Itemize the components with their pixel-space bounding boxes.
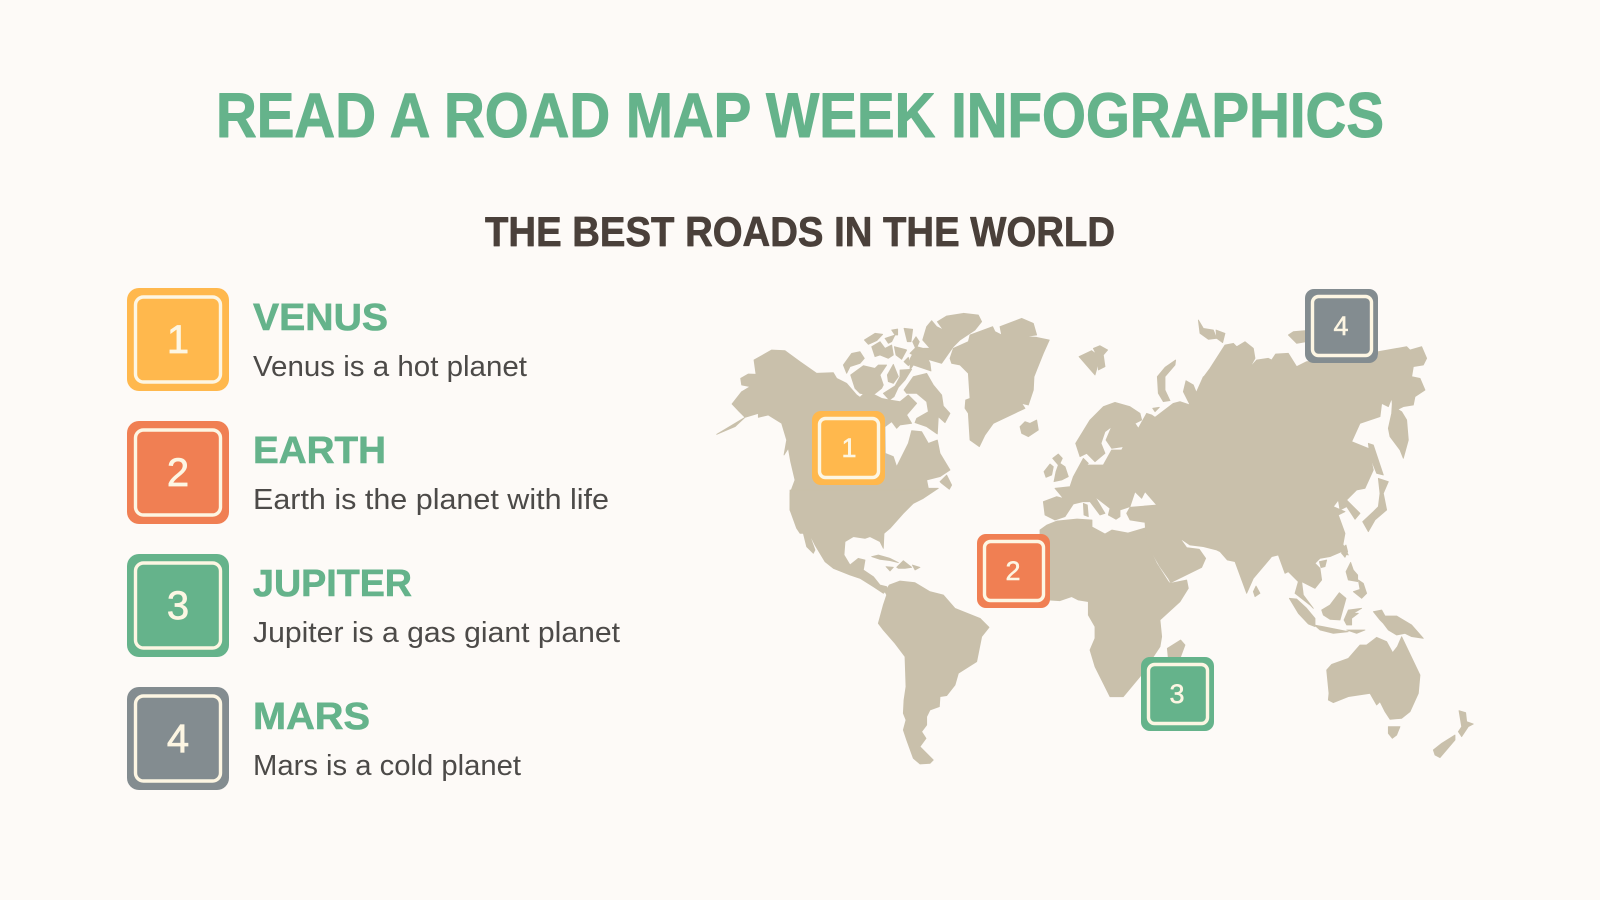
legend item: Jupiter: JUPITER [253,563,412,605]
legend item: Earth: Earth is the planet with life [253,484,609,516]
Mexico and Central America [790,490,920,593]
North America [717,313,982,533]
legend item: Venus: 1 [167,318,189,362]
Eurasia [1043,320,1427,608]
map marker 2: 2 [1005,556,1021,586]
map marker 2 [977,534,1050,608]
South America and Africa [878,519,1188,764]
map marker 4: 4 [1333,311,1349,341]
Greenland and Iceland [950,318,1049,447]
Arctic islands [843,328,931,400]
legend item: Jupiter: Jupiter is a gas giant planet [253,617,620,649]
legend item: Earth [127,421,609,524]
legend item: Earth: EARTH [253,430,386,472]
Southeast Asia and Oceania [1253,545,1473,758]
map marker 1 [812,411,885,485]
legend item: Jupiter: 3 [167,584,189,628]
legend item: Earth: 2 [167,451,189,495]
legend list [127,288,620,790]
legend item: Venus: VENUS [253,297,388,339]
map marker 4 [1305,289,1378,363]
legend item: Jupiter [127,554,620,657]
legend item: Venus: Venus is a hot planet [253,351,527,383]
map marker 1: 1 [841,433,857,463]
legend item: Mars [127,687,521,790]
subtitle: THE BEST ROADS IN THE WORLD [485,208,1115,255]
legend item: Mars: 4 [167,717,189,761]
legend item: Mars: Mars is a cold planet [253,750,521,782]
legend item: Venus [127,288,527,391]
world map [717,313,1473,764]
map marker 3 [1141,657,1214,731]
legend item: Mars: MARS [253,696,370,738]
title: READ A ROAD MAP WEEK INFOGRAPHICS [216,81,1384,151]
map marker 3: 3 [1169,679,1185,709]
